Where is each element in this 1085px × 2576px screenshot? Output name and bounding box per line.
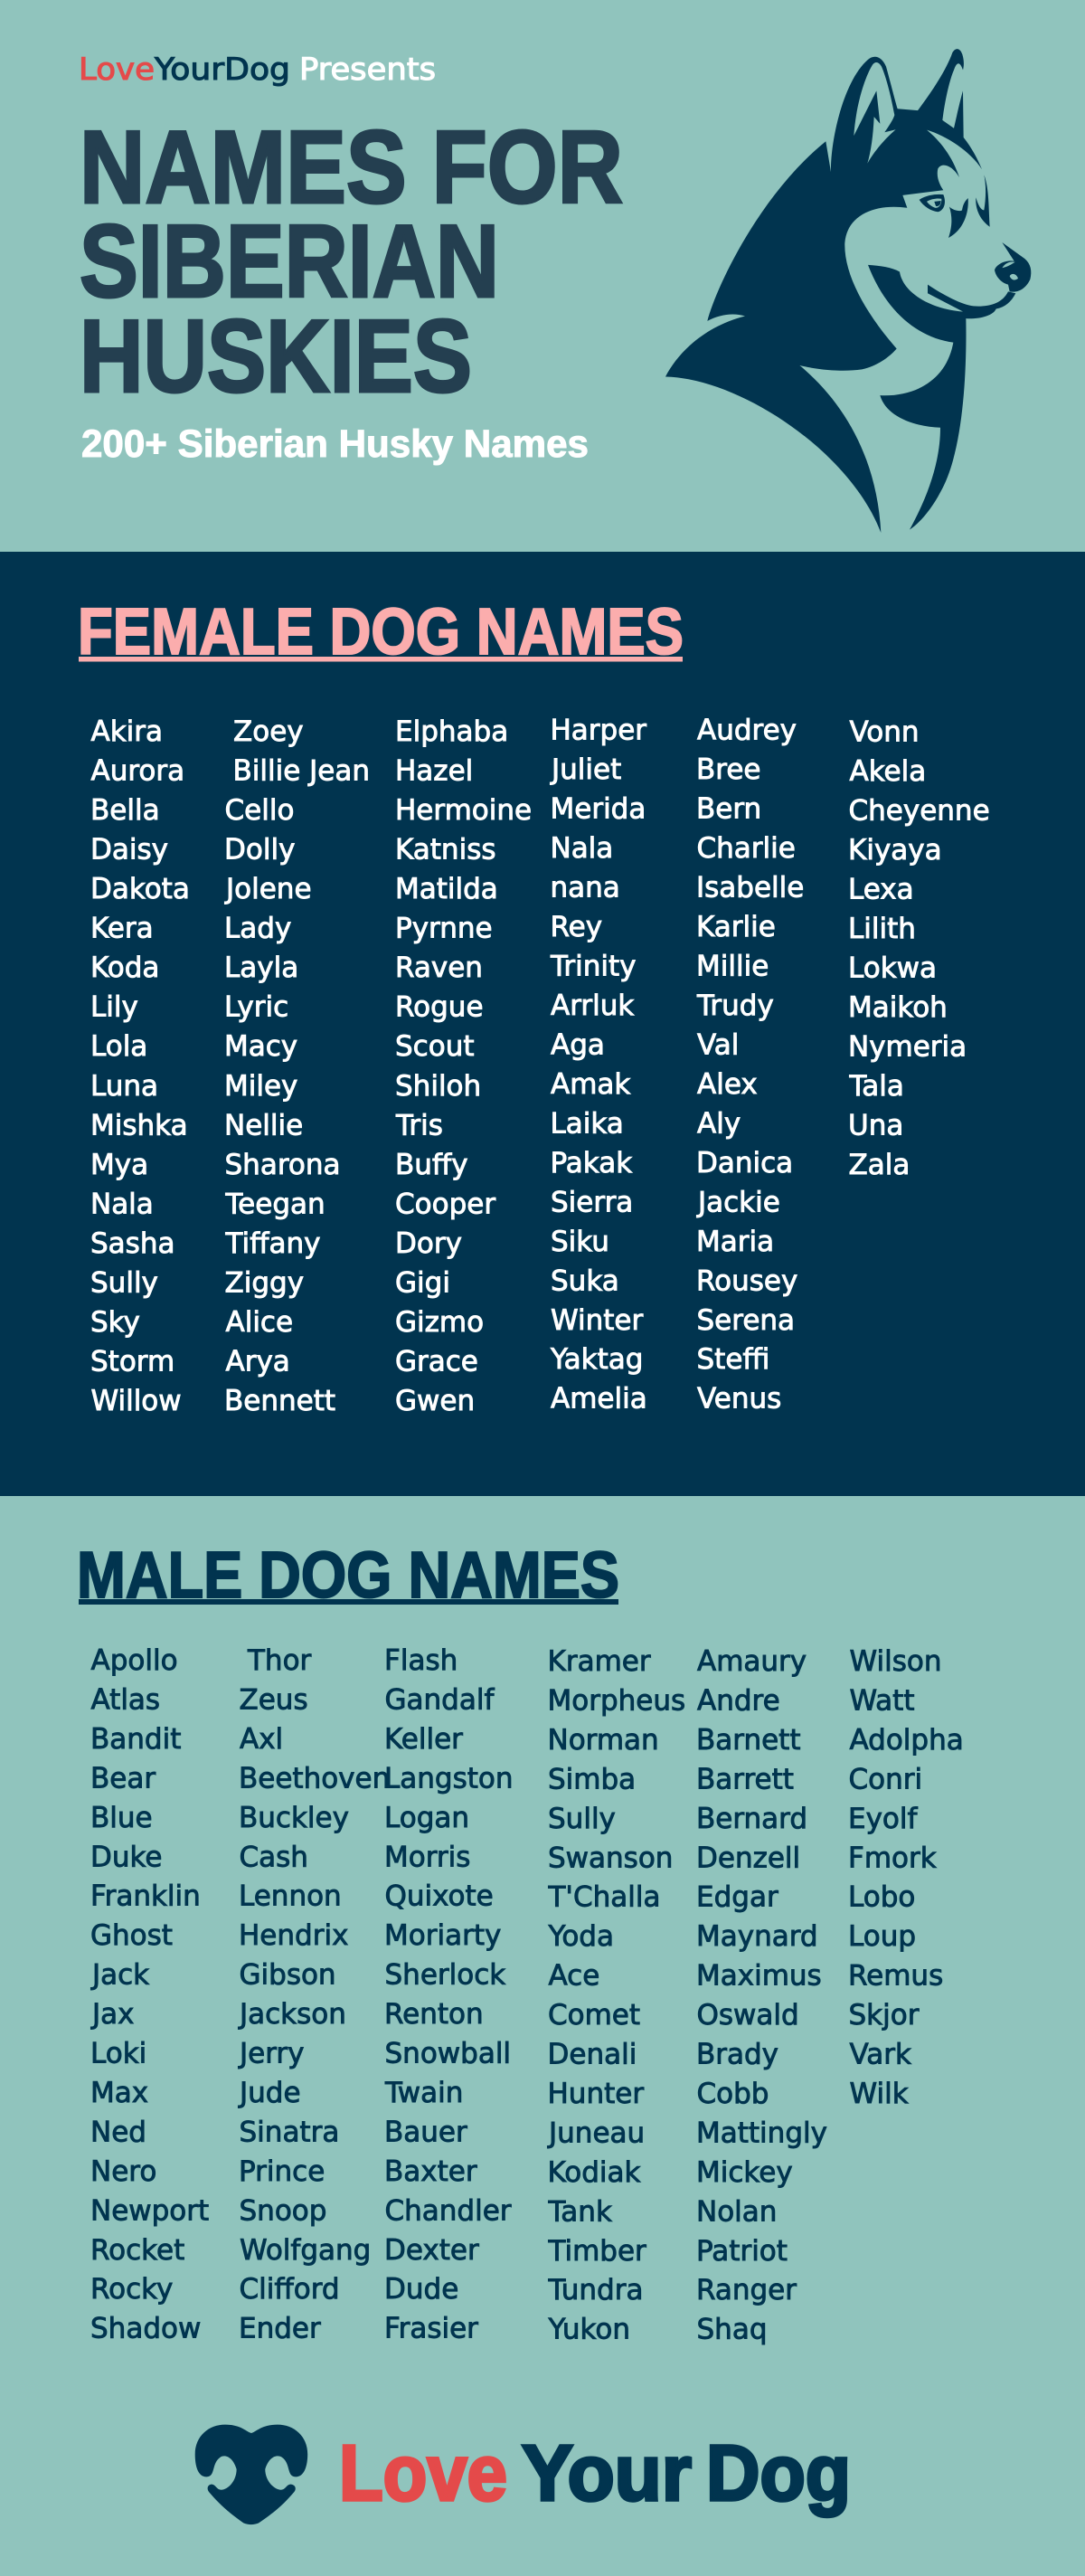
names column 1: Atlas <box>90 1683 160 1716</box>
names column 5: Jackie <box>696 1186 780 1218</box>
names column 3: Langston <box>384 1762 514 1795</box>
names column 1: Ghost <box>90 1919 173 1952</box>
names column 5: Venus <box>697 1383 781 1416</box>
names column 5: Barnett <box>696 1724 801 1757</box>
names column 5: Audrey <box>697 715 797 747</box>
names column 3: Elphaba <box>395 715 508 748</box>
names column 5: Millie <box>696 951 769 983</box>
names column 1: Kera <box>90 913 154 945</box>
names column 3: Grace <box>395 1345 478 1378</box>
names column 5: Cobb <box>696 2078 769 2110</box>
panel: female dog names <box>0 552 1085 1496</box>
names column 4: Tundra <box>548 2274 643 2306</box>
names column 4: Yaktag <box>550 1343 643 1376</box>
names column 3: Gandalf <box>385 1683 495 1716</box>
names column 5: Maria <box>696 1226 774 1258</box>
names column 2: Ender <box>239 2313 321 2345</box>
names column 3: Shiloh <box>395 1070 481 1103</box>
panel: header <box>79 49 1031 533</box>
names column 4: Kodiak <box>548 2156 641 2189</box>
names column 5: Maximus <box>696 1960 822 1993</box>
names column 1: Luna <box>90 1070 158 1103</box>
names column 6: Lokwa <box>848 952 937 984</box>
names column 5: Oswald <box>696 1999 799 2031</box>
names column 3: Tris <box>395 1109 443 1141</box>
presenter line: Love <box>79 52 155 88</box>
names column 4: T'Challa <box>548 1881 660 1914</box>
names column 4: Denali <box>548 2039 637 2071</box>
names column 5: Bern <box>696 793 761 826</box>
names column 3: Bauer <box>384 2116 467 2148</box>
names column 2: Wolfgang <box>240 2234 371 2267</box>
names column 2: Bennett <box>224 1385 335 1417</box>
names column 2: Jolene <box>224 873 312 905</box>
names column 5: Rousey <box>696 1264 797 1297</box>
names column 1: Loki <box>90 2037 146 2069</box>
names column 6: Kiyaya <box>848 834 942 867</box>
wordmark: Love <box>339 2429 507 2517</box>
names column 6: Akela <box>850 755 926 788</box>
names column 3: Hermoine <box>395 794 532 827</box>
title <box>80 110 623 414</box>
names column 2: Zeus <box>239 1683 308 1716</box>
names column 4: Sierra <box>551 1186 633 1218</box>
names column 3: Quixote <box>385 1880 494 1913</box>
names column 4: Swanson <box>548 1842 673 1874</box>
names column 6: Una <box>848 1109 903 1141</box>
names column 1: Bear <box>90 1762 156 1795</box>
names column 3: Gigi <box>395 1266 450 1299</box>
names column 1: Aurora <box>90 755 184 788</box>
names column 1: Bella <box>90 794 160 827</box>
names column 3: Morris <box>384 1841 470 1873</box>
names column 5: Denzell <box>696 1842 800 1874</box>
names column 6: Skjor <box>848 1999 920 2031</box>
names column 2: Lady <box>224 913 291 945</box>
names column 1: Akira <box>90 715 163 748</box>
presenter line: Presents <box>299 52 436 88</box>
wordmark: Your <box>522 2429 692 2517</box>
names column 1: Koda <box>90 952 159 984</box>
names column 4: Yukon <box>548 2314 630 2346</box>
names column 6: Nymeria <box>848 1030 967 1063</box>
names column 4: Trinity <box>550 951 637 983</box>
names column 3: Scout <box>395 1030 474 1063</box>
names column 1: Apollo <box>90 1644 178 1677</box>
names column 4: Timber <box>548 2235 646 2268</box>
names column 1: Nero <box>90 2155 156 2188</box>
names column 1: Bandit <box>90 1723 181 1756</box>
names column 5: Trudy <box>696 990 774 1022</box>
names column 4: Nala <box>550 832 613 865</box>
names column 2: Jude <box>238 2077 301 2109</box>
heading: male dog names: MALE DOG NAMES <box>77 1539 619 1612</box>
wordmark <box>339 2429 851 2517</box>
names column 2: Cello <box>224 794 294 827</box>
names column 3: Dexter <box>384 2234 479 2267</box>
names column 2: Layla <box>224 952 298 984</box>
names column 5: Steffi <box>696 1343 769 1376</box>
names column 5: Nolan <box>696 2195 777 2228</box>
presenter line: YourDog <box>154 52 290 88</box>
names column 4: Kramer <box>548 1645 651 1678</box>
names column 6: Lexa <box>848 873 914 905</box>
names column 4: Rey <box>550 911 602 943</box>
names column 2: Nellie <box>224 1109 303 1141</box>
names column 5: Bree <box>696 753 760 786</box>
names column 2: Tiffany <box>224 1227 320 1260</box>
title: HUSKIES <box>80 299 472 414</box>
names column 3: Hazel <box>395 755 473 788</box>
names column 6: Vonn <box>850 715 920 748</box>
names column 1: Daisy <box>90 834 168 867</box>
names column 2: Snoop <box>239 2194 326 2227</box>
names column 5: Amaury <box>697 1645 807 1678</box>
names column 4: Suka <box>551 1264 619 1297</box>
names column 1: Blue <box>90 1802 153 1834</box>
names column 1: Newport <box>90 2194 209 2227</box>
names column 1: Lola <box>90 1030 147 1063</box>
names column 3: Moriarty <box>384 1919 501 1952</box>
names column 5: Edgar <box>696 1881 778 1914</box>
names column 3: Dude <box>384 2273 458 2306</box>
names column 3: Matilda <box>395 873 498 905</box>
names column 2: Axl <box>240 1723 283 1756</box>
names column 3: Keller <box>384 1723 463 1756</box>
names column 3: Snowball <box>385 2037 511 2069</box>
names column 1: Shadow <box>90 2313 201 2345</box>
names column 6: Wilk <box>850 2078 909 2110</box>
names column 5: Barrett <box>696 1763 794 1795</box>
names column 6: Lobo <box>848 1881 915 1914</box>
names column 4: Ace <box>548 1960 599 1993</box>
names column 4: Arrluk <box>551 990 634 1022</box>
names column 4: Merida <box>550 793 646 826</box>
names column 3: Dory <box>395 1227 462 1260</box>
names column 4: Simba <box>548 1763 636 1795</box>
names column 1: Ned <box>90 2116 146 2148</box>
names column 2: Miley <box>224 1070 297 1103</box>
names column 4: Sully <box>548 1803 616 1835</box>
names column 1: Max <box>90 2077 148 2109</box>
names column 6: Vark <box>850 2039 911 2071</box>
names column 1: Sasha <box>90 1227 175 1260</box>
icon: heart with dog ears <box>195 2425 307 2524</box>
names column 2: Billie Jean <box>233 755 370 788</box>
names column 6: Watt <box>850 1684 914 1717</box>
names column 5: Maynard <box>696 1920 818 1953</box>
names column 2: Zoey <box>233 715 304 748</box>
names column 1: Sky <box>90 1306 140 1339</box>
names column 3: Gizmo <box>395 1306 484 1339</box>
heading: female dog names: FEMALE DOG NAMES <box>78 596 684 668</box>
wordmark: Dog <box>706 2429 851 2517</box>
title: SIBERIAN <box>80 204 499 319</box>
names column 6: Conri <box>848 1763 922 1795</box>
names column 4: nana <box>550 872 620 904</box>
names column 5: Patriot <box>696 2235 788 2268</box>
names column 6: Eyolf <box>848 1803 919 1835</box>
names column 3: Gwen <box>395 1385 475 1417</box>
names column 3: Flash <box>384 1644 458 1677</box>
names column 1: Rocket <box>90 2234 184 2267</box>
names column 2: Macy <box>224 1030 297 1063</box>
names column 6: Maikoh <box>848 991 948 1024</box>
names column 3: Sherlock <box>385 1959 505 1992</box>
names column 3: Baxter <box>384 2155 477 2188</box>
names column 5: Shaq <box>696 2314 767 2346</box>
names column 4: Harper <box>550 715 646 747</box>
names column 6: Adolpha <box>850 1724 964 1757</box>
names column 2: Buckley <box>239 1802 349 1834</box>
names column 6: Cheyenne <box>848 794 990 827</box>
names column 2: Teegan <box>224 1188 326 1220</box>
names column 2: Jackson <box>238 1998 346 2031</box>
names column 6: Lilith <box>848 913 916 945</box>
names column 5: Mattingly <box>696 2117 827 2149</box>
names column 2: Hendrix <box>239 1919 348 1952</box>
names column 5: Mickey <box>696 2156 793 2189</box>
names column 4: Siku <box>551 1226 609 1258</box>
names column 2: Prince <box>239 2155 325 2188</box>
icon: husky head <box>665 49 1031 533</box>
names column 3: Katniss <box>395 834 495 867</box>
names column 4: Aga <box>551 1028 605 1061</box>
names column 4: Yoda <box>548 1920 614 1953</box>
names column 1: Franklin <box>90 1880 201 1913</box>
names column 3: Chandler <box>385 2194 512 2227</box>
names column 5: Charlie <box>696 832 796 865</box>
names column 5: Ranger <box>696 2274 797 2306</box>
names column 2: Lyric <box>224 991 288 1024</box>
names column 3: Raven <box>395 952 483 984</box>
names column 5: Bernard <box>696 1803 807 1835</box>
names column 1: Willow <box>90 1385 182 1417</box>
names column 3: Renton <box>384 1998 484 2031</box>
subtitle: 200+ Siberian Husky Names <box>81 422 589 466</box>
names column 2: Arya <box>226 1345 290 1378</box>
names column 4: Juliet <box>550 753 621 786</box>
names column 4: Pakak <box>550 1147 632 1179</box>
names column 6: Fmork <box>848 1842 937 1874</box>
names column 3: Pyrnne <box>395 913 493 945</box>
names column 1: Jax <box>90 1998 134 2031</box>
names column 2: Sinatra <box>239 2116 339 2148</box>
names column 1: Duke <box>90 1841 162 1873</box>
names column 5: Brady <box>696 2039 778 2071</box>
names column 5: Val <box>697 1028 739 1061</box>
names column 4: Juneau <box>547 2117 645 2149</box>
names column 6: Remus <box>848 1960 943 1993</box>
names column 4: Winter <box>551 1304 643 1337</box>
names column 5: Aly <box>697 1107 741 1140</box>
names column 5: Serena <box>696 1304 795 1337</box>
names column 2: Jerry <box>238 2037 305 2069</box>
names column 1: Mya <box>90 1149 148 1181</box>
names column 2: Sharona <box>224 1149 340 1181</box>
names column 3: Cooper <box>395 1188 495 1220</box>
names column 3: Frasier <box>384 2313 478 2345</box>
names column 4: Amak <box>551 1068 630 1101</box>
names column 4: Amelia <box>551 1383 647 1416</box>
names column 3: Buffy <box>395 1149 468 1181</box>
names column 2: Dolly <box>224 834 295 867</box>
names column 2: Beethoven <box>239 1762 390 1795</box>
names column 5: Danica <box>696 1147 793 1179</box>
names column 4: Hunter <box>548 2078 644 2110</box>
names column 4: Laika <box>550 1107 624 1140</box>
names column 4: Comet <box>548 1999 640 2031</box>
names column 1: Dakota <box>90 873 190 905</box>
names column 1: Jack <box>90 1959 149 1992</box>
title: NAMES FOR <box>80 110 623 225</box>
names column 6: Zala <box>848 1149 910 1181</box>
names column 6: Loup <box>848 1920 916 1953</box>
names column 6: Tala <box>848 1070 904 1103</box>
names column 1: Storm <box>90 1345 175 1378</box>
names column 2: Thor <box>247 1644 312 1677</box>
names column 1: Nala <box>90 1188 154 1220</box>
names column 3: Twain <box>384 2077 463 2109</box>
footer logo <box>195 2425 851 2524</box>
names column 2: Alice <box>226 1306 293 1339</box>
names column 1: Lily <box>90 991 138 1024</box>
names column 2: Gibson <box>239 1959 336 1992</box>
names column 5: Alex <box>697 1068 758 1101</box>
names column 2: Cash <box>239 1841 308 1873</box>
presenter line <box>79 52 436 88</box>
names column 5: Karlie <box>696 911 776 943</box>
names column 2: Ziggy <box>224 1266 304 1299</box>
names column 1: Rocky <box>90 2273 173 2306</box>
names column 2: Lennon <box>239 1880 342 1913</box>
panel: male dog names <box>77 1539 964 2346</box>
names column 4: Norman <box>548 1724 659 1757</box>
names column 1: Sully <box>90 1266 158 1299</box>
names column 6: Wilson <box>850 1645 941 1678</box>
names column 3: Rogue <box>395 991 484 1024</box>
names column 2: Clifford <box>239 2273 340 2306</box>
names column 4: Tank <box>548 2195 612 2228</box>
names column 1: Mishka <box>90 1109 188 1141</box>
names column 4: Morpheus <box>548 1684 685 1717</box>
names column 5: Andre <box>697 1684 780 1717</box>
names column 5: Isabelle <box>696 872 804 904</box>
names column 3: Logan <box>384 1802 469 1834</box>
